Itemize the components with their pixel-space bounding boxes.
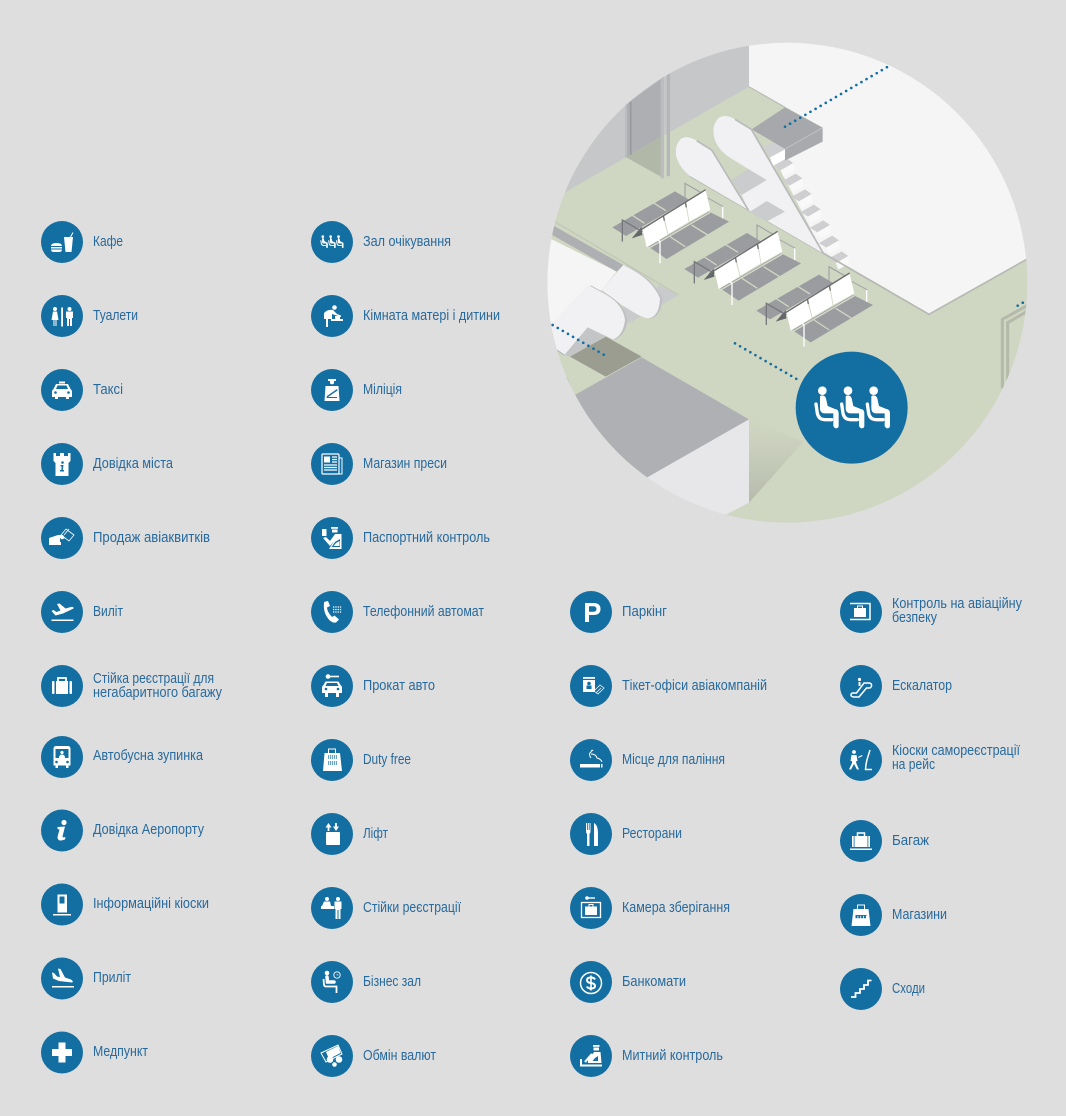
legend item: Інформаційні кіоски	[41, 884, 209, 926]
legend item: Сходи: Сходи	[892, 981, 925, 997]
upper white floor block	[749, 30, 1040, 314]
legend item: Виліт: Виліт	[93, 604, 123, 620]
icon: taxi	[52, 382, 72, 399]
legend item: Міліція: Міліція	[363, 382, 402, 398]
legend item: Паспортний контроль	[311, 517, 490, 559]
legend item: Телефонний автомат	[311, 591, 484, 633]
legend item: Продаж авіаквитків: Продаж авіаквитків	[93, 530, 210, 546]
legend item: Медпункт: Медпункт	[93, 1044, 148, 1060]
legend item: Контроль на авіаційну безпеку	[840, 591, 1023, 633]
icon: parking	[585, 603, 600, 622]
icon: information kiosk	[53, 894, 71, 916]
legend item: Туалети: Туалети	[93, 308, 138, 324]
icon: cafe	[51, 232, 73, 252]
icon: payphone	[324, 601, 342, 623]
legend item: Продаж авіаквитків	[41, 517, 210, 559]
floor edge	[690, 176, 1027, 314]
icon: currency exchange	[321, 1045, 342, 1067]
icon: city tower	[54, 453, 70, 476]
bench row 1	[612, 183, 729, 263]
icon: police	[324, 379, 340, 401]
legend item: Магазин преси	[311, 443, 447, 485]
legend item: Кафе	[41, 221, 123, 263]
legend item: Приліт	[41, 958, 131, 1000]
legend item: Довідка міста: Довідка міста	[93, 456, 174, 472]
legend item: Ескалатор	[840, 665, 952, 707]
icon: shop bag	[852, 905, 870, 926]
legend item: Контроль на авіаційну безпеку: безпеку	[892, 610, 938, 626]
escalators, upper	[676, 116, 823, 253]
legend item: Стійка реєстрації для негабаритного багажу: Стійка реєстрації для	[93, 671, 214, 687]
legend item: Камера зберігання	[570, 887, 730, 929]
legend item: Банкомати: Банкомати	[622, 974, 686, 990]
icon: passport control	[322, 527, 342, 549]
legend item: Контроль на авіаційну безпеку: Контроль на авіаційну	[892, 596, 1023, 612]
back wall	[565, 46, 749, 192]
legend item: Стійки реєстрації	[311, 887, 461, 929]
legend item: Зал очікування: Зал очікування	[363, 234, 451, 250]
icon: duty free bag	[323, 749, 342, 771]
icon: stairs	[851, 980, 872, 997]
dotted pointers	[553, 66, 1024, 380]
icon: airline ticket office	[583, 677, 604, 694]
icon: airport info	[58, 820, 67, 841]
panel: waiting hall illustration	[540, 30, 1040, 530]
legend item: Довідка міста	[41, 443, 174, 485]
legend item: Бізнес зал: Бізнес зал	[363, 974, 421, 990]
legend item: Кімната матері і дитини	[311, 295, 500, 337]
legend item: Приліт: Приліт	[93, 970, 131, 986]
legend item: Автобусна зупинка	[41, 736, 204, 778]
legend item: Ескалатор: Ескалатор	[892, 678, 952, 694]
legend item: Таксі	[41, 369, 123, 411]
lower left escalators	[540, 222, 678, 391]
legend item: Довідка Аеропорту: Довідка Аеропорту	[93, 822, 205, 838]
legend item: Місце для паління: Місце для паління	[622, 752, 725, 768]
legend item: Прокат авто: Прокат авто	[363, 678, 435, 694]
icon: oversized baggage	[52, 678, 72, 694]
legend item: Тікет-офіси авіакомпаній: Тікет-офіси авіакомпаній	[622, 678, 767, 694]
legend item: Обмін валют	[311, 1035, 436, 1077]
bench row 3	[756, 267, 873, 347]
legend item: Медпункт	[41, 1032, 148, 1074]
legend item: Телефонний автомат: Телефонний автомат	[363, 604, 484, 620]
legend item: Інформаційні кіоски: Інформаційні кіоски	[93, 896, 209, 912]
legend item: Магазини: Магазини	[892, 907, 947, 923]
legend item: Таксі: Таксі	[93, 382, 123, 398]
legend item: Кіоски самореєстрації на рейс	[840, 739, 1020, 781]
legend item: Міліція	[311, 369, 402, 411]
icon: medical cross	[52, 1042, 72, 1062]
legend item: Ліфт	[311, 813, 388, 855]
legend item: Магазини	[840, 894, 947, 936]
legend item: Бізнес зал	[311, 961, 421, 1003]
icon: check-in desk	[321, 897, 342, 919]
legend item: Ліфт: Ліфт	[363, 826, 388, 842]
legend item: Стійки реєстрації: Стійки реєстрації	[363, 900, 461, 916]
legend item: Камера зберігання: Камера зберігання	[622, 900, 730, 916]
legend item: Довідка Аеропорту	[41, 810, 205, 852]
legend item: Кіоски самореєстрації на рейс: Кіоски самореєстрації	[892, 743, 1020, 759]
icon: luggage storage	[582, 896, 600, 918]
legend item: Duty free: Duty free	[363, 752, 411, 768]
icon: arrival	[52, 968, 74, 988]
legend item: Виліт	[41, 591, 123, 633]
icon: escalator	[851, 678, 872, 697]
icon: waiting hall	[321, 235, 344, 248]
icon: smoking area	[580, 750, 602, 768]
lower block	[575, 358, 794, 514]
icon: lift	[326, 823, 340, 845]
legend item: Багаж: Багаж	[892, 833, 929, 849]
legend item: Автобусна зупинка: Автобусна зупинка	[93, 748, 204, 764]
icon: self check-in kiosk	[849, 750, 872, 770]
legend item: Паспортний контроль: Паспортний контроль	[363, 530, 490, 546]
legend item: Туалети	[41, 295, 138, 337]
icon: security control	[850, 604, 870, 620]
icon: bus	[54, 746, 70, 768]
legend item: Duty free	[311, 739, 411, 781]
legend item: Магазин преси: Магазин преси	[363, 456, 447, 472]
legend item: Ресторани: Ресторани	[622, 826, 682, 842]
icon: departure	[52, 604, 74, 621]
legend item: Кіоски самореєстрації на рейс: на рейс	[892, 757, 935, 773]
icon: car rental	[322, 674, 342, 697]
right door	[1002, 305, 1028, 388]
icon: ATM	[580, 972, 602, 994]
legend item: Стійка реєстрації для негабаритного багажу: негабаритного багажу	[93, 685, 223, 701]
legend item: Тікет-офіси авіакомпаній	[570, 665, 767, 707]
staircase	[763, 142, 849, 269]
legend item: Ресторани	[570, 813, 682, 855]
legend item: Стійка реєстрації для негабаритного багажу	[41, 665, 223, 707]
legend item: Банкомати	[570, 961, 686, 1003]
legend item: Обмін валют: Обмін валют	[363, 1048, 436, 1064]
legend item: Кімната матері і дитини: Кімната матері і дитини	[363, 308, 500, 324]
icon: customs control	[581, 1045, 602, 1066]
icon: mother and child room	[324, 305, 343, 327]
legend item: Кафе: Кафе	[93, 234, 123, 250]
legend item: Паркінг	[570, 591, 667, 633]
legend item: Місце для паління	[570, 739, 725, 781]
landing block	[752, 107, 823, 161]
legend item: Зал очікування	[311, 221, 451, 263]
legend item: Митний контроль: Митний контроль	[622, 1048, 723, 1064]
wall door	[625, 73, 670, 178]
icon: restaurant	[586, 823, 598, 846]
icon: waiting hall badge	[796, 352, 908, 464]
legend item: Багаж	[840, 820, 929, 862]
icon: baggage	[850, 833, 872, 850]
icon: toilets	[52, 307, 73, 326]
icon: newspaper	[322, 454, 342, 474]
icon: business lounge	[324, 971, 340, 993]
icon: ticket sale	[49, 529, 74, 545]
bench row 2	[684, 225, 801, 305]
legend item: Сходи	[840, 968, 925, 1010]
legend item: Паркінг: Паркінг	[622, 604, 667, 620]
floor	[552, 86, 1028, 522]
legend item: Митний контроль	[570, 1035, 723, 1077]
legend item: Прокат авто	[311, 665, 435, 707]
